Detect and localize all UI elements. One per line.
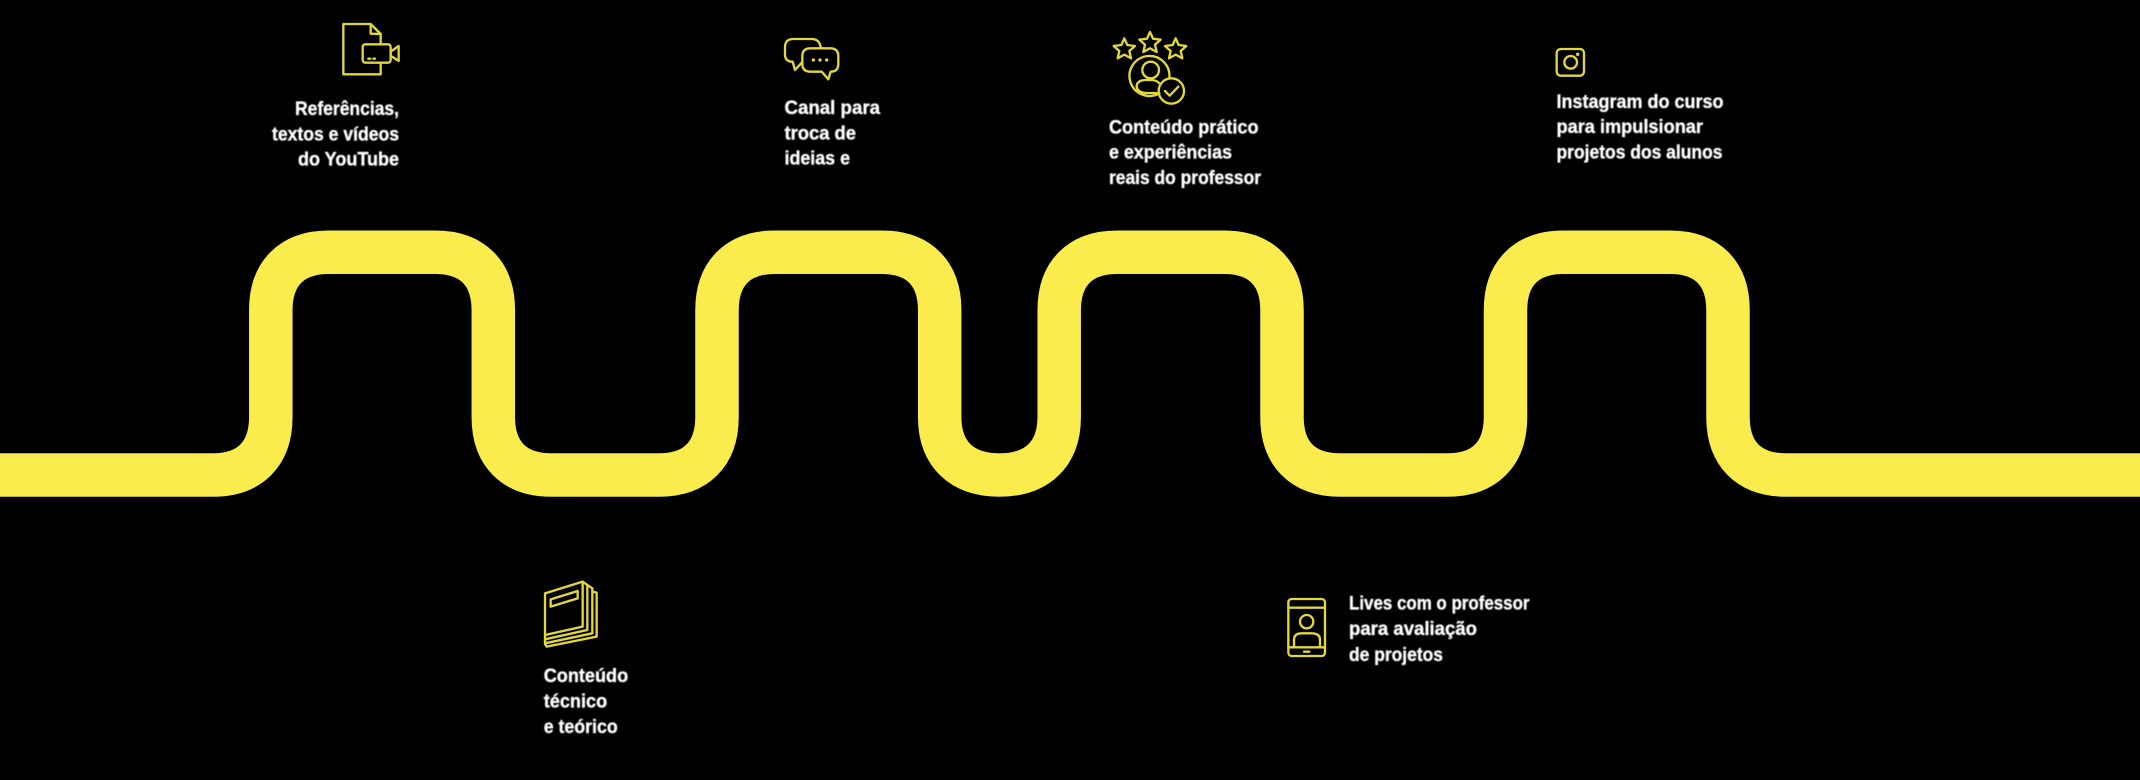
text: canal para troca de ideias: ideias e [784, 148, 850, 170]
icon: chat bubbles [785, 39, 838, 79]
text: lives com o professor: Lives com o professor [1349, 592, 1530, 614]
text: conteúdo técnico e teórico: Conteúdo [544, 665, 628, 687]
text: canal para troca de ideias: troca de [784, 122, 856, 144]
icon: rated professor [1114, 32, 1186, 104]
text: canal para troca de ideias: Canal para [784, 97, 880, 119]
icon: document with video camera [343, 24, 399, 74]
text: lives com o professor [1349, 592, 1530, 666]
icon: phone with person [1288, 599, 1325, 656]
text: lives com o professor: para avaliação [1349, 618, 1477, 640]
text: instagram do curso: para impulsionar [1556, 116, 1703, 138]
text: referências, textos e vídeos [272, 98, 399, 171]
text: conteúdo prático e experiências: reais do professor [1109, 167, 1261, 189]
text: referências, textos e vídeos: Referências, [295, 98, 399, 120]
panel: lives [1288, 592, 1530, 666]
text: lives com o professor: de projetos [1349, 644, 1443, 666]
icon: instagram [1557, 49, 1584, 76]
text: conteúdo técnico e teórico: técnico [544, 690, 607, 712]
text: conteúdo técnico e teórico: e teórico [544, 716, 618, 738]
panel: instagram [1556, 49, 1724, 164]
panel: conteúdo prático [1109, 32, 1261, 189]
text: conteúdo prático e experiências [1109, 116, 1261, 189]
icon: stacked books [545, 582, 597, 647]
text: referências, textos e vídeos: textos e vídeos [272, 124, 399, 146]
text: instagram do curso: Instagram do curso [1556, 91, 1724, 113]
text: instagram do curso [1556, 91, 1724, 164]
text: conteúdo prático e experiências: Conteúdo prático [1109, 116, 1259, 138]
yellow winding path [0, 252, 2140, 475]
text: conteúdo técnico e teórico [544, 665, 628, 738]
text: canal para troca de ideias [784, 97, 880, 170]
panel: conteúdo técnico [544, 582, 628, 738]
panel: referências [272, 24, 399, 171]
text: conteúdo prático e experiências: e experiências [1109, 142, 1232, 164]
text: referências, textos e vídeos: do YouTube [298, 149, 399, 171]
panel: canal de ideias [784, 39, 880, 169]
text: instagram do curso: projetos dos alunos [1556, 142, 1723, 164]
